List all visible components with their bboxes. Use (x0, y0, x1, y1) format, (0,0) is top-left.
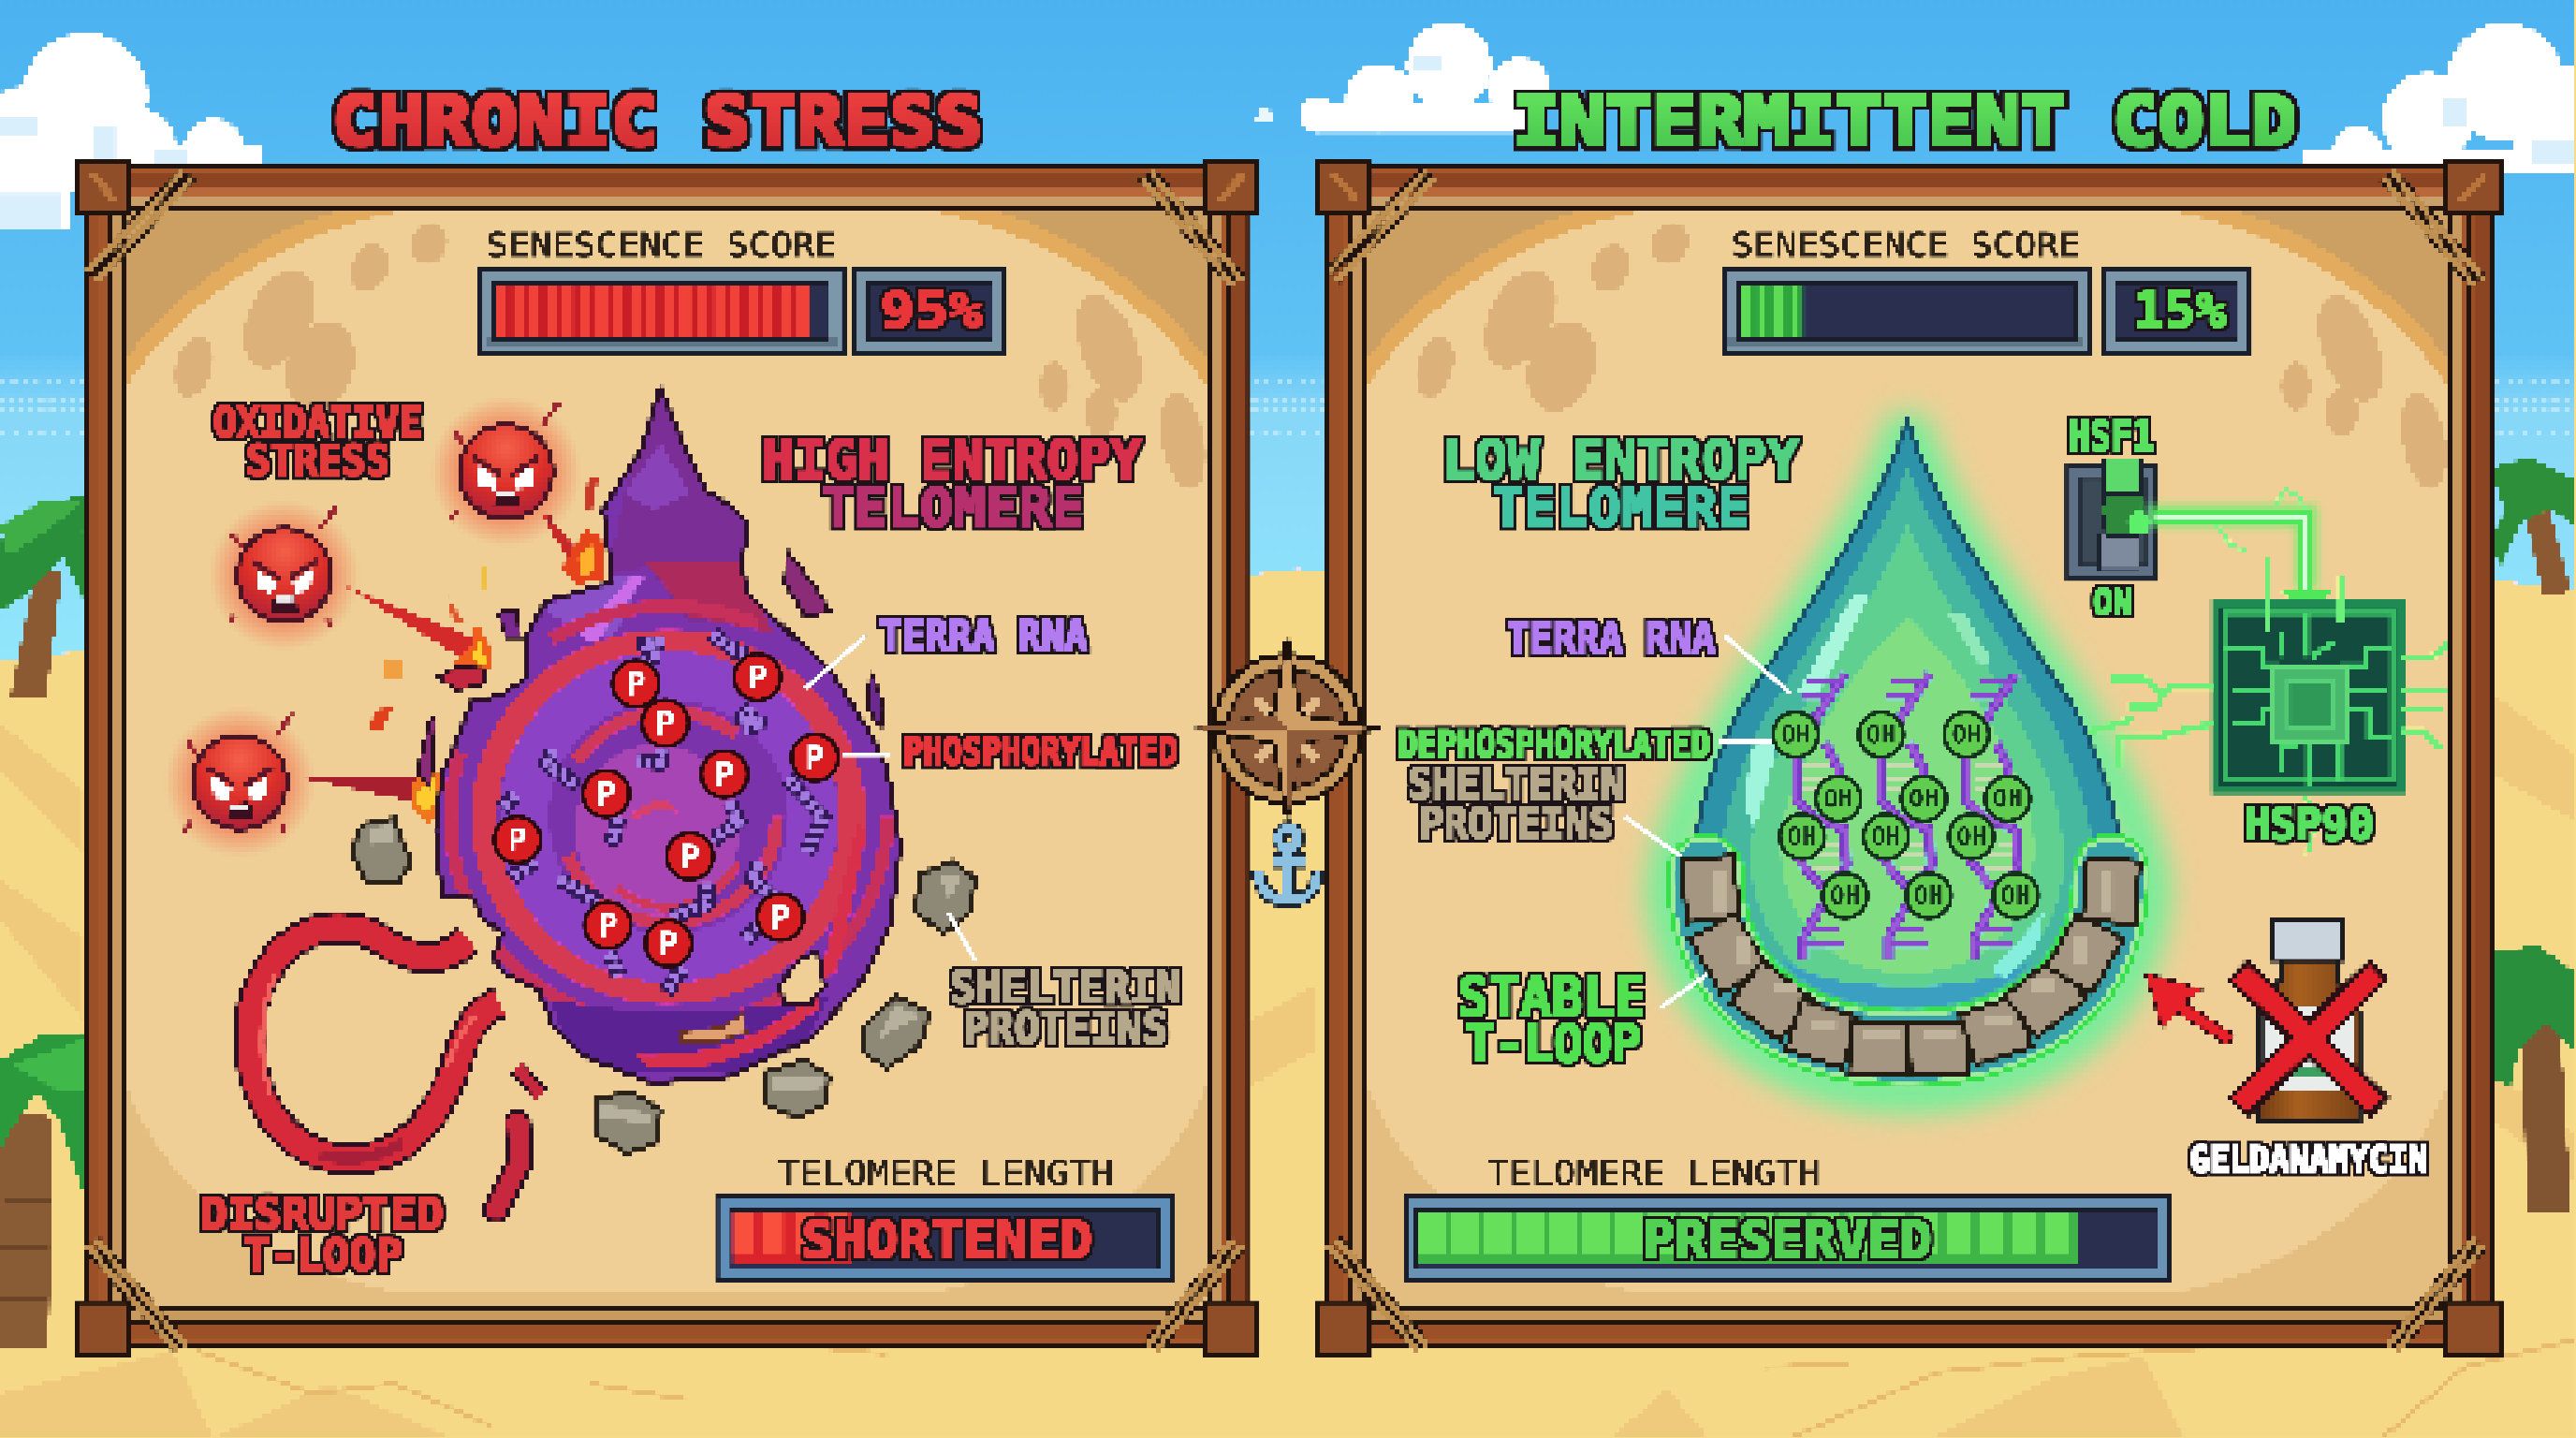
phosphate badges: P (714, 756, 735, 794)
palm tree: lower right (2489, 945, 2576, 1212)
low entropy telomere drop (1695, 419, 2119, 1051)
TERRA RNA helix 1 (1795, 674, 1847, 961)
hydroxyl badges: OH (1956, 823, 1986, 851)
label: dephosphorylated: DEPHOSPHORYLATED (1398, 723, 1710, 767)
label: low entropy telomere (1442, 428, 1799, 539)
hydroxyl badges: OH (1914, 882, 1943, 910)
phosphate badges: P (659, 925, 679, 963)
disrupted T-loop (249, 928, 540, 1210)
telomere length heading: cold: TELOMERE LENGTH (1486, 1155, 1821, 1194)
palm tree: upper left (0, 493, 92, 698)
leader highlight: terra rna (805, 636, 866, 689)
label: shelterin proteins cold: PROTEINS (1419, 799, 1614, 848)
detached shelterin rocks (352, 818, 976, 1153)
desert sand (0, 568, 2576, 1438)
senescence bar: cold (1724, 270, 2089, 353)
label: HSF1: HSF1 (2069, 413, 2154, 461)
leader: shelterin cold (1625, 816, 1680, 857)
HSF1 toggle switch (2069, 459, 2157, 580)
left parchment frame (77, 161, 1258, 1356)
label: shelterin proteins (949, 962, 1181, 1055)
leader: stable t-loop (1661, 975, 1707, 1007)
palm tree: lower left (0, 1032, 87, 1347)
label: geldanamycin: GELDANAMYCIN (2190, 1139, 2428, 1181)
TERRA RNA strands in blob (503, 633, 823, 992)
label: stable t-loop (1457, 965, 1647, 1075)
leader: dephosphorylated (1719, 740, 1771, 742)
phosphate badges: P (805, 740, 825, 778)
ROS radical 2 (209, 500, 359, 651)
phosphate badges: P (681, 838, 700, 876)
compass rose (1196, 638, 1380, 818)
hydroxyl badges: OH (1830, 882, 1860, 910)
drop glow (1666, 419, 2150, 1093)
phosphate badges: P (770, 899, 790, 937)
label: ON: ON (2093, 582, 2132, 624)
label: shelterin proteins cold: SHELTERIN (1408, 759, 1625, 809)
high entropy telomere blob (434, 384, 903, 1086)
phosphate badges: P (748, 659, 768, 697)
HSP90 chip (2215, 603, 2402, 790)
phosphate badges: P (596, 775, 616, 814)
right parchment frame (1318, 161, 2499, 1356)
label: high entropy telomere: TELOMERE (822, 478, 1084, 539)
stable T-loop arc (1681, 856, 2140, 1077)
phosphate badges (494, 654, 838, 966)
percent box frame: cold (2103, 270, 2250, 353)
palm tree: upper right (2489, 457, 2576, 594)
senescence heading: cold: SENESCENCE SCORE (1732, 227, 2080, 265)
title: chronic stress: CHRONIC STRESS (332, 81, 983, 160)
hydroxyl badges: OH (1871, 823, 1901, 851)
telomere status: shortened: SHORTENED (801, 1210, 1092, 1269)
label: shelterin proteins: PROTEINS (962, 1004, 1168, 1055)
telomere length heading: chronic: TELOMERE LENGTH (777, 1155, 1114, 1194)
hydroxyl badges: OH (1866, 721, 1895, 749)
phosphate badges: P (655, 705, 675, 743)
ROS radical 3 (165, 707, 315, 858)
score value 95 percent: 95% (881, 282, 983, 339)
geldanamycin bottle (2258, 920, 2359, 1121)
label: terra rna cold: TERRA RNA (1506, 613, 1715, 663)
hydroxyl badges: OH (1823, 785, 1853, 814)
label: phosphorylated: PHOSPHORYLATED (903, 729, 1178, 773)
horizon shimmer (0, 381, 2576, 433)
anchor icon (1258, 829, 1318, 901)
red X over bottle (2247, 979, 2369, 1098)
cloud: centre (1299, 23, 1551, 133)
title: intermittent cold: INTERMITTENT COLD (1513, 81, 2297, 160)
labels and badges layer (200, 81, 2428, 1282)
HSF1 to HSP90 signal arrow (2145, 490, 2328, 613)
cloud: top left (0, 33, 263, 230)
label: disrupted t-loop: T-LOOP (243, 1230, 402, 1282)
senescence heading: chronic: SENESCENCE SCORE (487, 227, 836, 265)
label: high entropy telomere: HIGH ENTROPY (762, 428, 1142, 492)
telomere status: preserved: PRESERVED (1643, 1210, 1932, 1269)
phosphate badges: P (598, 907, 618, 946)
label: shelterin proteins: SHELTERIN (949, 962, 1181, 1014)
leader: terra rna cold (1725, 636, 1791, 694)
dune ridge lines (198, 1340, 2576, 1438)
label: terra rna: TERRA RNA (879, 611, 1088, 661)
hydroxyl badges: OH (2001, 882, 2030, 910)
hydroxyl badges: OH (1788, 823, 1817, 851)
electric arcs around chip (2086, 559, 2448, 855)
senescence bar: chronic (479, 270, 842, 353)
label: shelterin proteins cold (1408, 759, 1625, 848)
phosphate badges: P (507, 821, 527, 859)
score value 15 percent: 15% (2134, 282, 2226, 339)
leader: phosphorylated (842, 753, 890, 756)
label: oxidative stress (213, 398, 422, 485)
percent box frame: chronic (856, 270, 1005, 353)
hydroxyl badges: OH (1909, 785, 1939, 814)
cloud: right (2304, 23, 2576, 176)
label: oxidative stress: OXIDATIVE (213, 398, 422, 448)
hydroxyl badges (1774, 712, 2038, 917)
sand dunes and shadows (0, 690, 2576, 1438)
red oxidative arrows and sparks (305, 474, 884, 825)
label: high entropy telomere (762, 428, 1142, 539)
TERRA RNA helix 2 (1881, 674, 1931, 961)
label: stable t-loop: T-LOOP (1466, 1014, 1641, 1075)
sky and sea (0, 0, 2576, 707)
label: stable t-loop: STABLE (1457, 965, 1647, 1029)
hydroxyl badges: OH (1952, 721, 1982, 749)
label: oxidative stress: STRESS (246, 435, 389, 485)
label: low entropy telomere: LOW ENTROPY (1442, 428, 1799, 492)
leader: shelterin (948, 912, 976, 961)
ROS radical 1 (431, 396, 581, 548)
TERRA RNA helix 3 (1967, 674, 2017, 961)
label: HSP90: HSP90 (2244, 800, 2374, 851)
geldanamycin inhibition arrow (2145, 973, 2234, 1045)
cloud: small (1253, 109, 1273, 124)
rock highlights (368, 825, 962, 1124)
label: disrupted t-loop (200, 1189, 444, 1282)
hydroxyl badges: OH (1780, 721, 1810, 749)
label: disrupted t-loop: DISRUPTED (200, 1189, 444, 1240)
telomere bar: shortened (716, 1195, 1171, 1282)
telomere bar: preserved (1405, 1195, 2170, 1282)
label: low entropy telomere: TELOMERE (1492, 478, 1749, 539)
hydroxyl badges: OH (1993, 785, 2023, 814)
phosphate badges: P (626, 666, 646, 704)
leader: terra rna (805, 636, 866, 689)
